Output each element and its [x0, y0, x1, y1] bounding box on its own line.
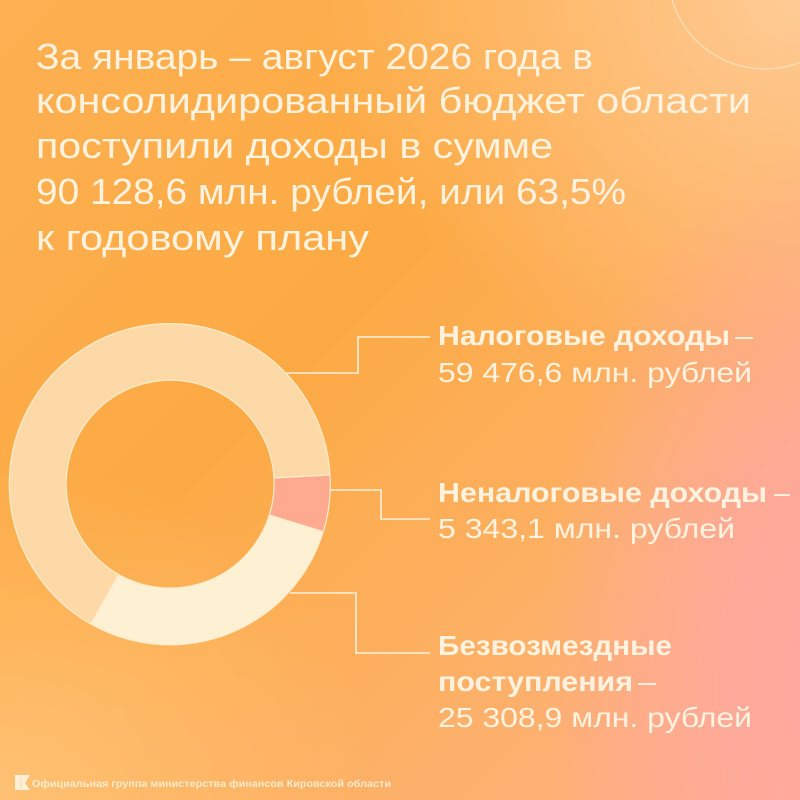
- label: non-tax revenue: Неналоговые доходы: [438, 477, 767, 508]
- label: tax revenue: [438, 320, 753, 388]
- label: gratuitous receipts: –: [638, 666, 656, 697]
- label: tax revenue: 59 476,6 млн. рублей: [438, 357, 752, 388]
- label: tax revenue: –: [735, 320, 753, 351]
- label: gratuitous receipts: Безвозмездные: [438, 630, 672, 661]
- label: non-tax revenue: [438, 477, 790, 544]
- label: non-tax revenue: –: [774, 477, 790, 508]
- decorative circle outline: [668, 0, 800, 69]
- title: к годовому плану: [36, 217, 370, 258]
- title: За январь – август 2026 года в: [36, 36, 593, 77]
- segment: non-tax revenue: [269, 475, 330, 532]
- title: [36, 36, 751, 258]
- segment: gratuitous receipts: [91, 515, 323, 645]
- leader line: tax revenue: [287, 337, 430, 373]
- label: non-tax revenue: 5 343,1 млн. рублей: [438, 513, 735, 544]
- label: tax revenue: Налоговые доходы: [438, 320, 730, 351]
- title: консолидированный бюджет области: [36, 80, 751, 121]
- label: gratuitous receipts: 25 308,9 млн. рублей: [438, 702, 752, 733]
- segment: tax revenue: [9, 324, 330, 624]
- title: 90 128,6 млн. рублей, или 63,5%: [36, 171, 626, 212]
- leader line: gratuitous receipts: [290, 593, 430, 653]
- donut chart: [9, 324, 330, 645]
- label: gratuitous receipts: поступления: [438, 666, 633, 697]
- label: gratuitous receipts: [438, 630, 752, 733]
- footer text: Официальная группа министерства финансов Кировской области: [32, 778, 391, 790]
- footer logo icon: [15, 775, 30, 790]
- leader line: non-tax revenue: [331, 490, 430, 519]
- title: поступили доходы в сумме: [36, 125, 553, 166]
